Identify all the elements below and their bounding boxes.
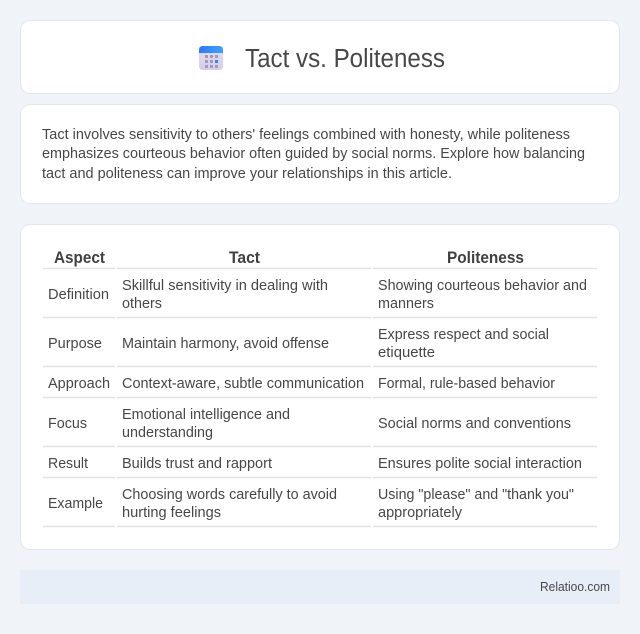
intro text — [42, 126, 585, 182]
row: Definition: manners — [378, 295, 434, 312]
title: Tact vs. Politeness — [245, 45, 445, 73]
row: Example: Example — [48, 495, 103, 512]
table header row: Aspect — [54, 249, 105, 267]
row: Example: appropriately — [378, 504, 462, 521]
intro text: tact and politeness can improve your relationships in this article. — [42, 165, 452, 182]
row: Definition: others — [122, 295, 162, 312]
panel: comparison table — [20, 224, 620, 550]
row: Approach: Approach — [48, 375, 110, 392]
panel: title header — [20, 20, 620, 94]
row: Example: Choosing words carefully to avoid — [122, 486, 337, 503]
row: Result: Ensures polite social interaction — [378, 455, 582, 472]
row: Result: Builds trust and rapport — [122, 455, 273, 472]
row: Purpose: Purpose — [48, 335, 102, 352]
row: Focus: understanding — [122, 424, 213, 441]
row: Result: Result — [48, 455, 89, 472]
intro text: Tact involves sensitivity to others' feelings combined with honesty, while politeness — [42, 126, 570, 143]
table header row: Tact — [229, 249, 260, 267]
row: Definition: Definition — [48, 286, 109, 303]
row: Definition: Showing courteous behavior and — [378, 277, 587, 294]
row: Focus: Social norms and conventions — [378, 415, 571, 432]
icon: calendar — [199, 46, 223, 70]
row: Result — [48, 455, 582, 472]
panel: introduction — [20, 104, 620, 204]
row: Definition — [48, 277, 587, 312]
row: Example: Using "please" and "thank you" — [378, 486, 574, 503]
intro text: emphasizes courteous behavior often guided by social norms. Explore how balancing — [42, 145, 585, 162]
row: Approach: Context-aware, subtle communication — [122, 375, 364, 392]
row: Example: hurting feelings — [122, 504, 221, 521]
row: Focus: Focus — [48, 415, 87, 432]
row: Purpose: etiquette — [378, 344, 435, 361]
row: Definition: Skillful sensitivity in dealing with — [122, 277, 328, 294]
row: Approach — [48, 375, 555, 392]
footer bar — [20, 570, 620, 604]
row: Purpose: Express respect and social — [378, 326, 549, 343]
row: Purpose — [48, 326, 549, 361]
row: Focus: Emotional intelligence and — [122, 406, 290, 423]
table header row — [54, 249, 524, 267]
row: Purpose: Maintain harmony, avoid offense — [122, 335, 329, 352]
row: Focus — [48, 406, 571, 441]
footer credit: Relatioo.com — [540, 580, 610, 594]
row: Example — [48, 486, 574, 521]
table header row: Politeness — [447, 249, 524, 267]
row: Approach: Formal, rule-based behavior — [378, 375, 555, 392]
